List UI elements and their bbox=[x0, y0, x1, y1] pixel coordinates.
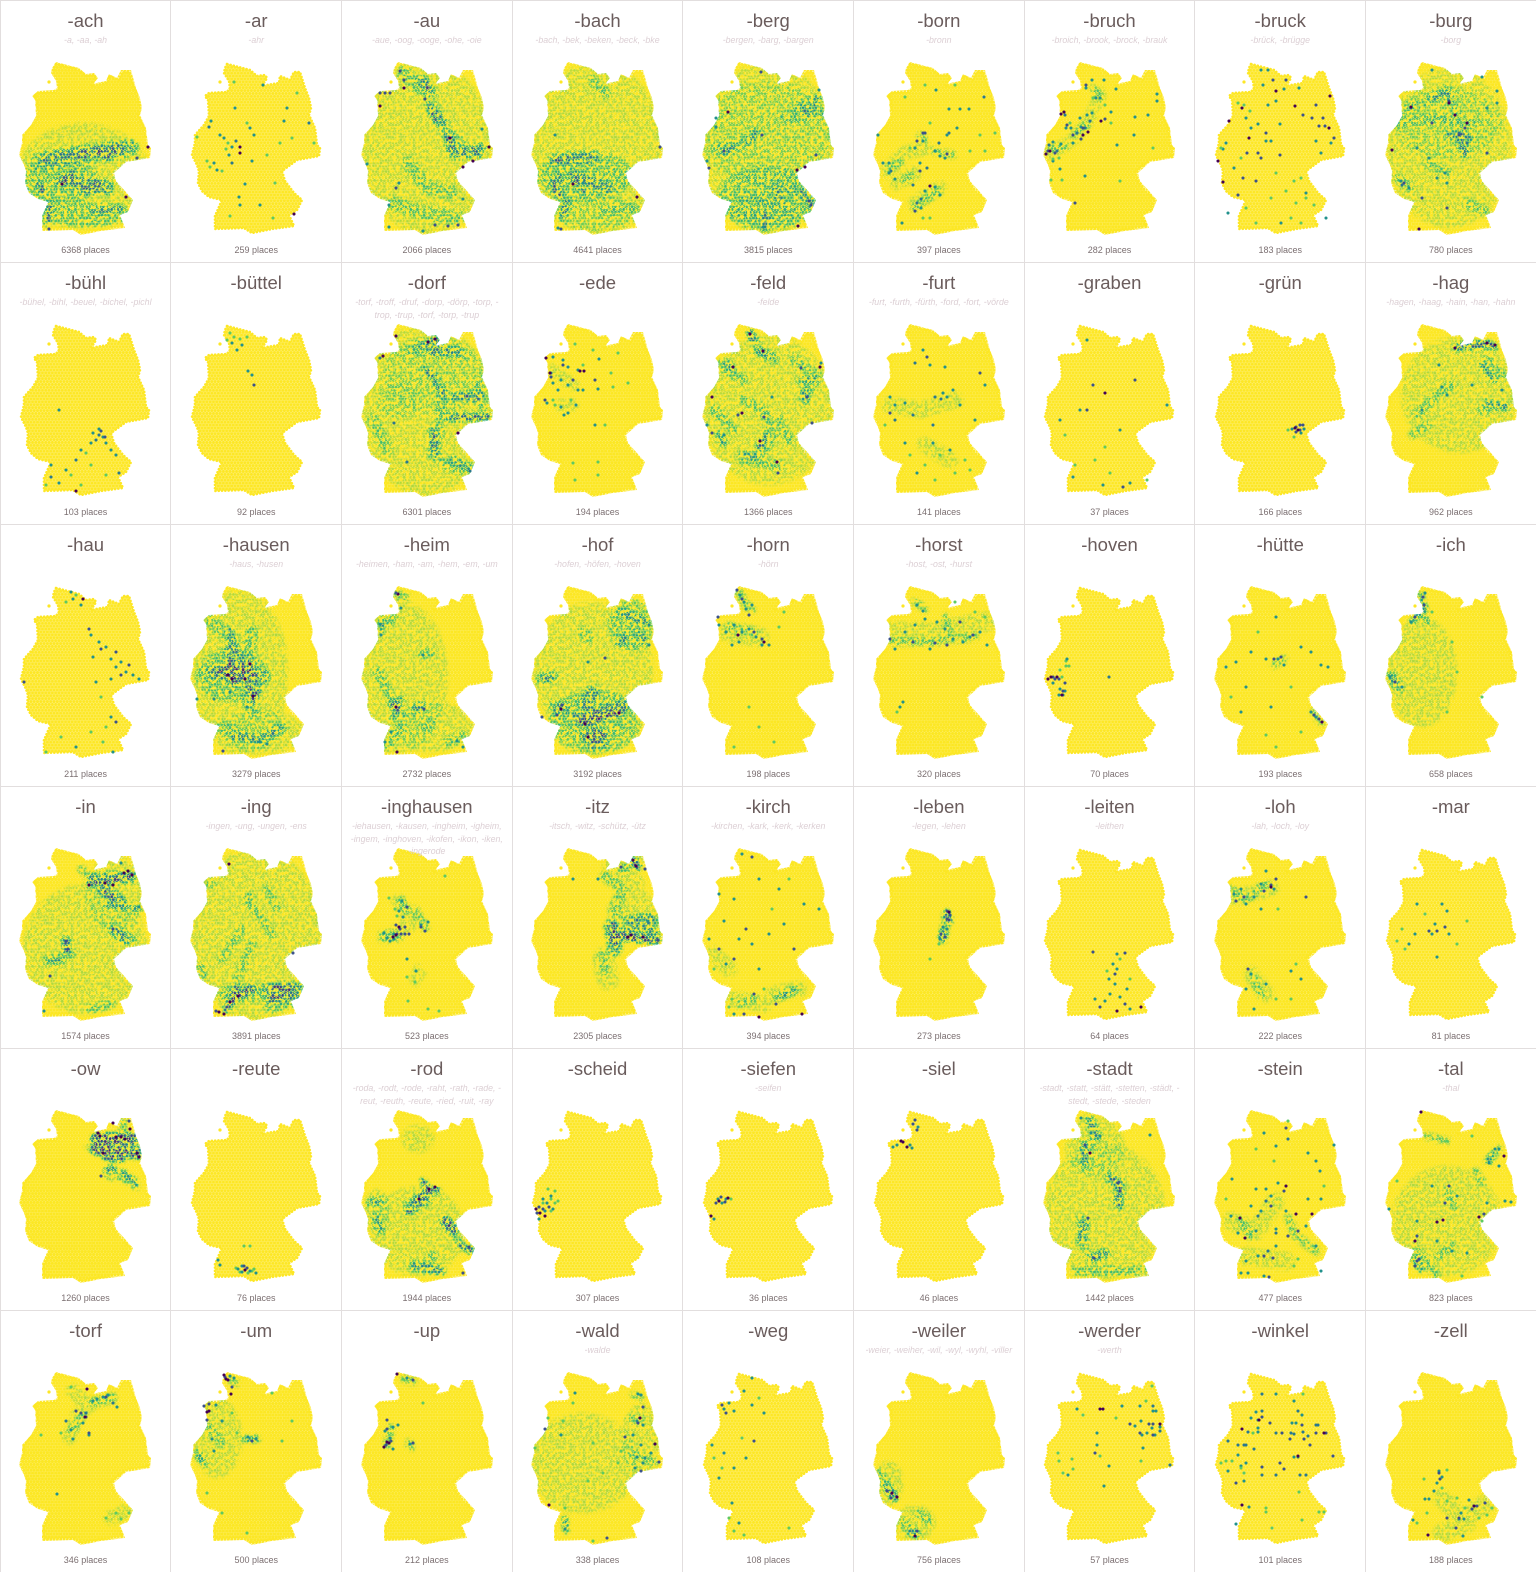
title: -grün bbox=[1259, 272, 1302, 293]
variants: -hörn bbox=[758, 559, 778, 569]
hex map: -dorf bbox=[361, 324, 493, 497]
count: 3891 places bbox=[232, 1031, 280, 1041]
title: -burg bbox=[1429, 10, 1472, 31]
hex map: -rod bbox=[361, 1110, 493, 1283]
title: -leiten bbox=[1084, 796, 1135, 817]
title: -bühl bbox=[65, 272, 106, 293]
hex map: -bühl bbox=[20, 324, 150, 496]
hex map: -heim bbox=[361, 586, 493, 759]
title: -furt bbox=[922, 272, 955, 293]
count: 756 places bbox=[917, 1555, 961, 1565]
hex map: -feld bbox=[702, 324, 834, 497]
count: 962 places bbox=[1429, 507, 1473, 517]
hex map: -zell bbox=[1385, 1372, 1517, 1545]
count: 320 places bbox=[917, 769, 961, 779]
title: -büttel bbox=[230, 272, 282, 293]
variants: trop, -trup, -torf, -torp, -trup bbox=[375, 310, 479, 320]
panel: -kirch bbox=[682, 786, 854, 1049]
title: -up bbox=[413, 1320, 440, 1341]
hex map: -up bbox=[361, 1372, 493, 1545]
hex map: -wald bbox=[531, 1372, 663, 1545]
variants: -hagen, -haag, -hain, -han, -hahn bbox=[1386, 297, 1515, 307]
panel: -weg bbox=[682, 1310, 854, 1572]
variants: -bühel, -bihl, -beuel, -bichel, -pichl bbox=[20, 297, 152, 307]
count: 1944 places bbox=[403, 1293, 451, 1303]
variants: -aue, -oog, -ooge, -ohe, -oie bbox=[372, 35, 482, 45]
panel: -wald bbox=[512, 1310, 683, 1572]
count: 166 places bbox=[1258, 507, 1302, 517]
variants: -felde bbox=[757, 297, 779, 307]
title: -itz bbox=[585, 796, 610, 817]
count: 194 places bbox=[576, 507, 619, 517]
title: -stadt bbox=[1086, 1058, 1133, 1079]
panel: -heim bbox=[356, 538, 498, 779]
panel: -furt bbox=[869, 276, 1008, 517]
count: 3815 places bbox=[744, 245, 792, 255]
hex map: -reute bbox=[190, 1110, 322, 1282]
count: 46 places bbox=[920, 1293, 958, 1303]
title: -weiler bbox=[912, 1320, 966, 1341]
variants: -ahr bbox=[248, 35, 264, 45]
panel: -grün bbox=[1194, 262, 1366, 525]
variants: -legen, -lehen bbox=[912, 821, 966, 831]
hex map: -um bbox=[190, 1372, 322, 1545]
panel: -reute bbox=[170, 1048, 342, 1311]
title: -um bbox=[240, 1320, 272, 1341]
count: 307 places bbox=[576, 1293, 619, 1303]
variants: -itsch, -witz, -schütz, -ütz bbox=[549, 821, 646, 831]
title: -ede bbox=[579, 272, 616, 293]
title: -winkel bbox=[1251, 1320, 1309, 1341]
panel: -burg bbox=[1365, 0, 1536, 263]
title: -reute bbox=[232, 1058, 280, 1079]
variants: -roda, -rodt, -rode, -raht, -rath, -rade, - bbox=[353, 1083, 501, 1093]
panel: -büttel bbox=[170, 262, 342, 525]
title: -siel bbox=[922, 1058, 956, 1079]
hex map: -born bbox=[873, 62, 1005, 235]
variants: -host, -ost, -hurst bbox=[906, 559, 972, 569]
hex map: -berg bbox=[702, 62, 834, 235]
panel: -itz bbox=[512, 786, 683, 1049]
count: 64 places bbox=[1090, 1031, 1129, 1041]
panel: -berg bbox=[682, 0, 854, 263]
title: -ow bbox=[71, 1058, 100, 1079]
panel: -weiler bbox=[853, 1310, 1025, 1572]
variants: -bach, -bek, -beken, -beck, -bke bbox=[535, 35, 660, 45]
count: 211 places bbox=[64, 769, 107, 779]
count: 477 places bbox=[1258, 1293, 1302, 1303]
title: -hausen bbox=[223, 534, 290, 555]
panel: -hau bbox=[0, 524, 171, 787]
hex map: -ing bbox=[190, 848, 322, 1021]
panel: -ow bbox=[0, 1048, 171, 1311]
count: 2732 places bbox=[403, 769, 451, 779]
panel: -hof bbox=[531, 538, 663, 779]
variants: -ingen, -ung, -ungen, -ens bbox=[206, 821, 307, 831]
panel: -hausen bbox=[190, 538, 322, 779]
title: -born bbox=[917, 10, 960, 31]
panel: -graben bbox=[1024, 262, 1195, 525]
count: 108 places bbox=[746, 1555, 790, 1565]
hex map: -itz bbox=[531, 848, 663, 1021]
hex map: -bruck bbox=[1214, 62, 1346, 234]
count: 222 places bbox=[1258, 1031, 1302, 1041]
panel: -ede bbox=[531, 276, 663, 517]
count: 273 places bbox=[917, 1031, 961, 1041]
title: -werder bbox=[1078, 1320, 1141, 1341]
panel: -hoven bbox=[1024, 524, 1195, 787]
count: 823 places bbox=[1429, 1293, 1473, 1303]
count: 92 places bbox=[237, 507, 275, 517]
hex map: -hag bbox=[1385, 324, 1517, 497]
variants: -stadt, -statt, -stätt, -stetten, -städt, - bbox=[1040, 1083, 1179, 1093]
variants: reut, -reuth, -reute, -ried, -ruit, -ray bbox=[360, 1096, 494, 1106]
title: -in bbox=[75, 796, 96, 817]
hex map: -siefen bbox=[702, 1110, 834, 1282]
count: 188 places bbox=[1429, 1555, 1473, 1565]
count: 36 places bbox=[749, 1293, 787, 1303]
count: 81 places bbox=[1432, 1031, 1470, 1041]
hex map: -leiten bbox=[1044, 848, 1174, 1020]
hex map: -ar bbox=[190, 62, 322, 234]
hex map: -furt bbox=[873, 324, 1005, 497]
title: -zell bbox=[1434, 1320, 1468, 1341]
hex map: -stadt bbox=[1043, 1110, 1175, 1283]
variants: stedt, -stede, -steden bbox=[1068, 1096, 1151, 1106]
panel: -bruch bbox=[1024, 0, 1195, 263]
variants: -ingem, -inghoven, -ikofen, -ikon, -iken, bbox=[351, 834, 503, 844]
hex map: -mar bbox=[1386, 848, 1516, 1020]
panel: -horst bbox=[873, 538, 1005, 779]
title: -dorf bbox=[408, 272, 446, 293]
hex map: -weg bbox=[702, 1372, 834, 1544]
variants: -borg bbox=[1441, 35, 1461, 45]
variants: -a, -aa, -ah bbox=[64, 35, 107, 45]
count: 1260 places bbox=[61, 1293, 110, 1303]
panel: -hag bbox=[1385, 276, 1517, 517]
hex map: -horst bbox=[873, 586, 1005, 759]
panel: -winkel bbox=[1194, 1310, 1366, 1572]
count: 103 places bbox=[64, 507, 107, 517]
count: 3192 places bbox=[573, 769, 622, 779]
panel: -stein bbox=[1194, 1048, 1366, 1311]
hex map: -kirch bbox=[702, 848, 834, 1021]
panel: -scheid bbox=[512, 1048, 683, 1311]
title: -bruch bbox=[1083, 10, 1136, 31]
title: -hoven bbox=[1081, 534, 1138, 555]
hex map: -hau bbox=[20, 586, 150, 758]
title: -wald bbox=[575, 1320, 620, 1341]
count: 2066 places bbox=[403, 245, 451, 255]
variants: -bronn bbox=[926, 35, 952, 45]
hex map: -winkel bbox=[1214, 1372, 1346, 1544]
count: 259 places bbox=[234, 245, 278, 255]
title: -mar bbox=[1432, 796, 1470, 817]
hex map: -ede bbox=[531, 324, 663, 497]
hex map: -büttel bbox=[190, 324, 322, 496]
variants bbox=[353, 1083, 501, 1106]
count: 212 places bbox=[405, 1555, 449, 1565]
hex map: -leben bbox=[873, 848, 1005, 1021]
panel: -feld bbox=[702, 276, 834, 517]
hex map: -hausen bbox=[190, 586, 322, 759]
count: 397 places bbox=[917, 245, 961, 255]
title: -scheid bbox=[568, 1058, 627, 1079]
variants: -kirchen, -kark, -kerk, -kerken bbox=[711, 821, 825, 831]
variants: -broich, -brook, -brock, -brauk bbox=[1052, 35, 1167, 45]
variants bbox=[355, 297, 498, 320]
variants: -heimen, -ham, -am, -hem, -em, -um bbox=[356, 559, 498, 569]
hex map: -siel bbox=[874, 1110, 1004, 1282]
panel: -stadt bbox=[1024, 1048, 1195, 1311]
panel: -hütte bbox=[1214, 538, 1346, 779]
title: -horn bbox=[747, 534, 790, 555]
count: 76 places bbox=[237, 1293, 275, 1303]
hex map: -inghausen bbox=[361, 848, 493, 1021]
panel: -bühl bbox=[0, 262, 171, 525]
count: 1574 places bbox=[61, 1031, 110, 1041]
hex map: -hof bbox=[531, 586, 663, 759]
hex map: -hoven bbox=[1044, 586, 1174, 758]
panel: -siel bbox=[853, 1048, 1025, 1311]
count: 394 places bbox=[746, 1031, 790, 1041]
variants: -lah, -loch, -loy bbox=[1251, 821, 1309, 831]
count: 70 places bbox=[1090, 769, 1129, 779]
panel: -ar bbox=[170, 0, 342, 263]
count: 6301 places bbox=[403, 507, 451, 517]
hex map: -tal bbox=[1385, 1110, 1517, 1283]
hex map: -ich bbox=[1385, 586, 1517, 759]
title: -bach bbox=[574, 10, 621, 31]
title: -berg bbox=[747, 10, 790, 31]
count: 2305 places bbox=[573, 1031, 622, 1041]
panel: -leben bbox=[853, 786, 1025, 1049]
panel: -horn bbox=[702, 538, 834, 779]
variants: -furt, -furth, -fürth, -ford, -fort, -vörde bbox=[869, 297, 1009, 307]
hex map: -ach bbox=[19, 62, 151, 235]
panel: -mar bbox=[1365, 786, 1536, 1049]
panel: -torf bbox=[0, 1310, 171, 1572]
title: -kirch bbox=[746, 796, 791, 817]
variants: -werth bbox=[1097, 1345, 1122, 1355]
variants: -torf, -troff, -druf, -dorp, -dörp, -torp, - bbox=[355, 297, 498, 307]
variants: -ingerode bbox=[408, 846, 445, 856]
count: 6368 places bbox=[61, 245, 110, 255]
hex map: -stein bbox=[1214, 1110, 1346, 1283]
panel: -ich bbox=[1385, 538, 1517, 779]
title: -leben bbox=[913, 796, 965, 817]
title: -siefen bbox=[740, 1058, 796, 1079]
count: 3279 places bbox=[232, 769, 280, 779]
variants: -thal bbox=[1442, 1083, 1459, 1093]
title: -graben bbox=[1078, 272, 1141, 293]
hex map: -torf bbox=[19, 1372, 151, 1545]
title: -au bbox=[413, 10, 440, 31]
variants: -brück, -brügge bbox=[1250, 35, 1310, 45]
title: -hof bbox=[582, 534, 613, 555]
title: -hag bbox=[1432, 272, 1469, 293]
panel: -in bbox=[0, 787, 151, 1048]
title: -bruck bbox=[1255, 10, 1306, 31]
variants: -bergen, -barg, -bargen bbox=[723, 35, 814, 45]
count: 523 places bbox=[405, 1031, 449, 1041]
title: -weg bbox=[748, 1320, 788, 1341]
count: 101 places bbox=[1258, 1555, 1302, 1565]
title: -horst bbox=[915, 534, 962, 555]
panel: -bach bbox=[512, 0, 683, 263]
panel: -loh bbox=[1194, 786, 1366, 1049]
count: 57 places bbox=[1090, 1555, 1129, 1565]
title: -hau bbox=[67, 534, 104, 555]
count: 193 places bbox=[1258, 769, 1302, 779]
count: 658 places bbox=[1429, 769, 1473, 779]
panel: -dorf bbox=[356, 276, 498, 517]
variants: -hofen, -höfen, -hoven bbox=[554, 559, 641, 569]
hex map: -bruch bbox=[1043, 62, 1175, 235]
count: 338 places bbox=[576, 1555, 619, 1565]
panel: -werder bbox=[1024, 1310, 1195, 1572]
hex map: -horn bbox=[702, 586, 834, 759]
panel: -ach bbox=[0, 0, 171, 263]
variants bbox=[1040, 1083, 1180, 1106]
hex map: -ow bbox=[19, 1110, 151, 1283]
panel: -tal bbox=[1365, 1048, 1536, 1311]
variants: -haus, -husen bbox=[229, 559, 283, 569]
title: -inghausen bbox=[381, 796, 473, 817]
panel: -leiten bbox=[1024, 786, 1195, 1049]
title: -loh bbox=[1265, 796, 1296, 817]
variants: -seifen bbox=[755, 1083, 781, 1093]
count: 346 places bbox=[64, 1555, 107, 1565]
title: -tal bbox=[1438, 1058, 1464, 1079]
variants bbox=[351, 821, 503, 856]
title: -feld bbox=[750, 272, 786, 293]
count: 198 places bbox=[746, 769, 790, 779]
count: 500 places bbox=[234, 1555, 278, 1565]
hex map: -graben bbox=[1044, 324, 1174, 496]
title: -ar bbox=[245, 10, 268, 31]
hex map: -hütte bbox=[1214, 586, 1346, 759]
count: 282 places bbox=[1088, 245, 1131, 255]
count: 1366 places bbox=[744, 507, 792, 517]
title: -stein bbox=[1258, 1058, 1303, 1079]
variants: -weier, -weiher, -wil, -wyl, -wyhl, -viller bbox=[866, 1345, 1012, 1355]
panel: -zell bbox=[1365, 1310, 1536, 1572]
hex map: -werder bbox=[1044, 1372, 1174, 1544]
count: 141 places bbox=[917, 507, 961, 517]
variants: -leithen bbox=[1095, 821, 1124, 831]
title: -ich bbox=[1436, 534, 1466, 555]
variants: -walde bbox=[585, 1345, 610, 1355]
count: 183 places bbox=[1258, 245, 1302, 255]
title: -rod bbox=[410, 1058, 443, 1079]
panel: -bruck bbox=[1194, 0, 1366, 263]
panel: -born bbox=[853, 0, 1025, 263]
panel: -siefen bbox=[682, 1048, 854, 1311]
hex map: -in bbox=[19, 848, 151, 1021]
count: 1442 places bbox=[1085, 1293, 1134, 1303]
hex map: -weiler bbox=[873, 1372, 1005, 1545]
variants: -iehausen, -kausen, -ingheim, -igheim, bbox=[352, 821, 502, 831]
title: -ach bbox=[68, 10, 104, 31]
panel: -inghausen bbox=[341, 786, 513, 1049]
panel: -um bbox=[170, 1310, 342, 1572]
title: -hütte bbox=[1257, 534, 1304, 555]
panel: -rod bbox=[341, 1048, 513, 1311]
panel: -au bbox=[341, 0, 513, 263]
hex map: -burg bbox=[1385, 62, 1517, 235]
panel: -ing bbox=[170, 786, 342, 1049]
hex map: -loh bbox=[1214, 848, 1346, 1021]
panel: -up bbox=[341, 1310, 513, 1572]
hex map: -grün bbox=[1214, 324, 1346, 496]
hex map: -scheid bbox=[532, 1110, 662, 1282]
title: -heim bbox=[404, 534, 450, 555]
hex map: -bach bbox=[531, 62, 663, 235]
title: -torf bbox=[69, 1320, 102, 1341]
count: 37 places bbox=[1090, 507, 1129, 517]
title: -ing bbox=[241, 796, 272, 817]
hex map: -au bbox=[361, 62, 493, 235]
count: 780 places bbox=[1429, 245, 1473, 255]
count: 4641 places bbox=[573, 245, 622, 255]
